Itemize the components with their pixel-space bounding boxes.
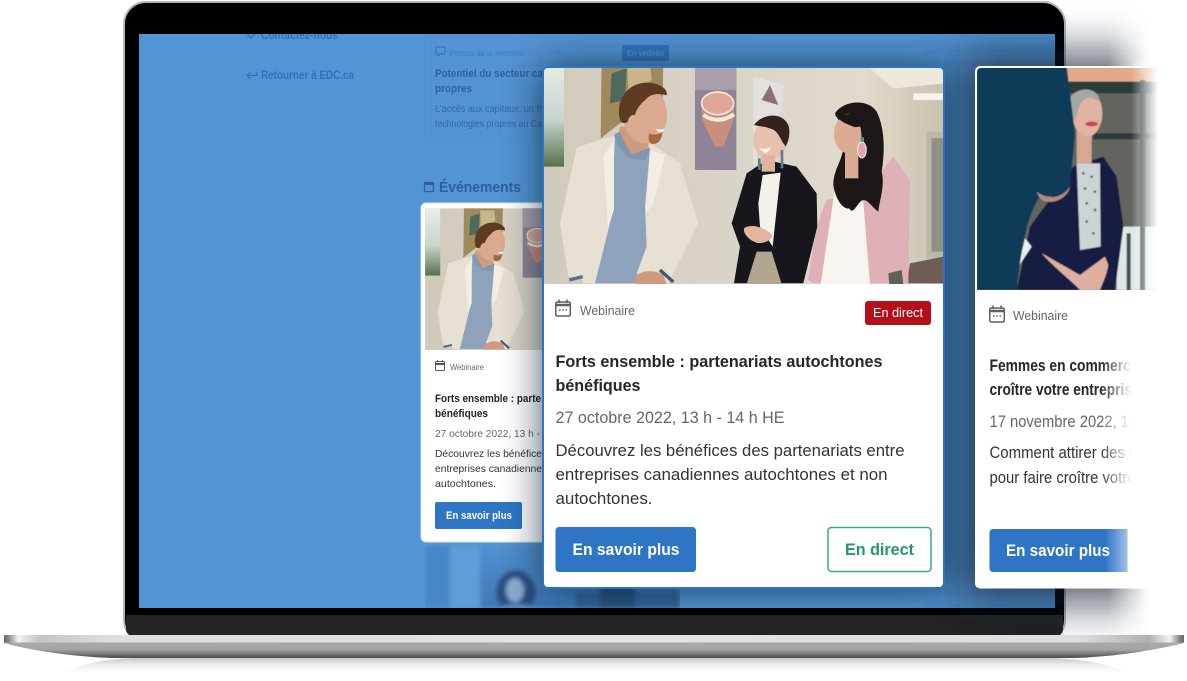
- second card photo: [977, 68, 1157, 290]
- main card photo: [540, 60, 945, 287]
- second card text fade: [1102, 362, 1132, 483]
- second card description: pour faire croître votre: [990, 469, 1136, 487]
- second card button: En savoir plus: [1006, 542, 1110, 560]
- small event card: Webinaire: [450, 362, 484, 372]
- reflection under base: [62, 658, 1128, 673]
- main card description: Découvrez les bénéfices des partenariats entre: [556, 442, 904, 460]
- second card title: [990, 360, 1131, 398]
- shadow: main card: [543, 67, 944, 588]
- main card button: live: En direct: [845, 541, 914, 559]
- sidebar link: contact: [246, 34, 338, 39]
- featured panel: [435, 45, 669, 129]
- main card button: learn more: En savoir plus: [572, 541, 680, 559]
- second event photo, tinted: [426, 546, 680, 608]
- featured panel: En vedette: [627, 48, 664, 58]
- main card title: [556, 353, 882, 395]
- small event card: bénéfiques: [435, 408, 488, 420]
- small event card: [420, 202, 542, 542]
- screen: [139, 20, 1055, 614]
- main card description: entreprises canadiennes autochtones et non: [556, 466, 888, 484]
- main card date: 27 octobre 2022, 13 h - 14 h HE: [556, 409, 784, 427]
- small event card: 27 octobre 2022, 13 h -: [435, 428, 540, 440]
- second card description: Comment attirer des clients: [990, 444, 1172, 462]
- sidebar link: contact: Contactez-nous: [261, 30, 338, 42]
- small event card: Découvrez les bénéfice: [435, 448, 542, 460]
- main card live badge: En direct: [873, 305, 923, 320]
- main card icon: calendar: [556, 300, 570, 316]
- events heading: [424, 178, 520, 192]
- second card date: 17 novembre 2022, 13 h: [990, 413, 1150, 431]
- sidebar link: return to EDC: [246, 70, 354, 80]
- second card button fade: [1106, 529, 1128, 572]
- second event card: [975, 66, 1157, 588]
- main card description: [556, 442, 904, 508]
- laptop lid: [124, 2, 1065, 642]
- featured panel: technologies propres au Ca: [435, 119, 542, 130]
- laptop base top: [4, 635, 1184, 642]
- featured panel: Potentiel du secteur ca: [435, 68, 544, 80]
- main event card: [540, 60, 945, 588]
- laptop chin: [126, 615, 1063, 636]
- sidebar link: return to EDC: Retourner à EDC.ca: [261, 70, 355, 82]
- small card icon: calendar: [436, 360, 444, 370]
- small card button: [435, 502, 522, 529]
- main card title: Forts ensemble : partenariats autochtones: [556, 353, 882, 371]
- featured badge: [622, 45, 669, 61]
- second card type label: Webinaire: [1013, 308, 1068, 323]
- second card button: [990, 529, 1140, 572]
- main card description: autochtones.: [556, 490, 652, 508]
- laptop base lower: [4, 642, 1184, 658]
- main card button: live: [828, 528, 931, 572]
- main card button: learn more: [556, 527, 696, 572]
- second card title: croître votre entreprise: [990, 381, 1140, 399]
- small event card: Forts ensemble : parte: [435, 393, 541, 405]
- featured panel: L'accès aux capitaux, un fr: [435, 104, 543, 115]
- featured panel: propres: [435, 83, 472, 95]
- main card live badge: [865, 301, 931, 325]
- featured panel: Propos de la semaine: [450, 48, 524, 58]
- second card icon: calendar: [990, 306, 1004, 322]
- small event card: entreprises canadienne: [435, 463, 542, 475]
- small event card: autochtones.: [435, 478, 496, 490]
- shadow: second card: [936, 18, 1146, 635]
- second card description: [990, 446, 1130, 486]
- second card photo fade: [1131, 60, 1158, 291]
- events heading: Événements: [439, 179, 521, 196]
- second card title: Femmes en commerce: [990, 357, 1138, 375]
- icon: speech bubble: [436, 47, 445, 56]
- main card title: bénéfiques: [556, 377, 640, 395]
- main card type label: Webinaire: [580, 303, 635, 318]
- small event card: En savoir plus: [446, 510, 512, 522]
- small card photo: [425, 208, 542, 350]
